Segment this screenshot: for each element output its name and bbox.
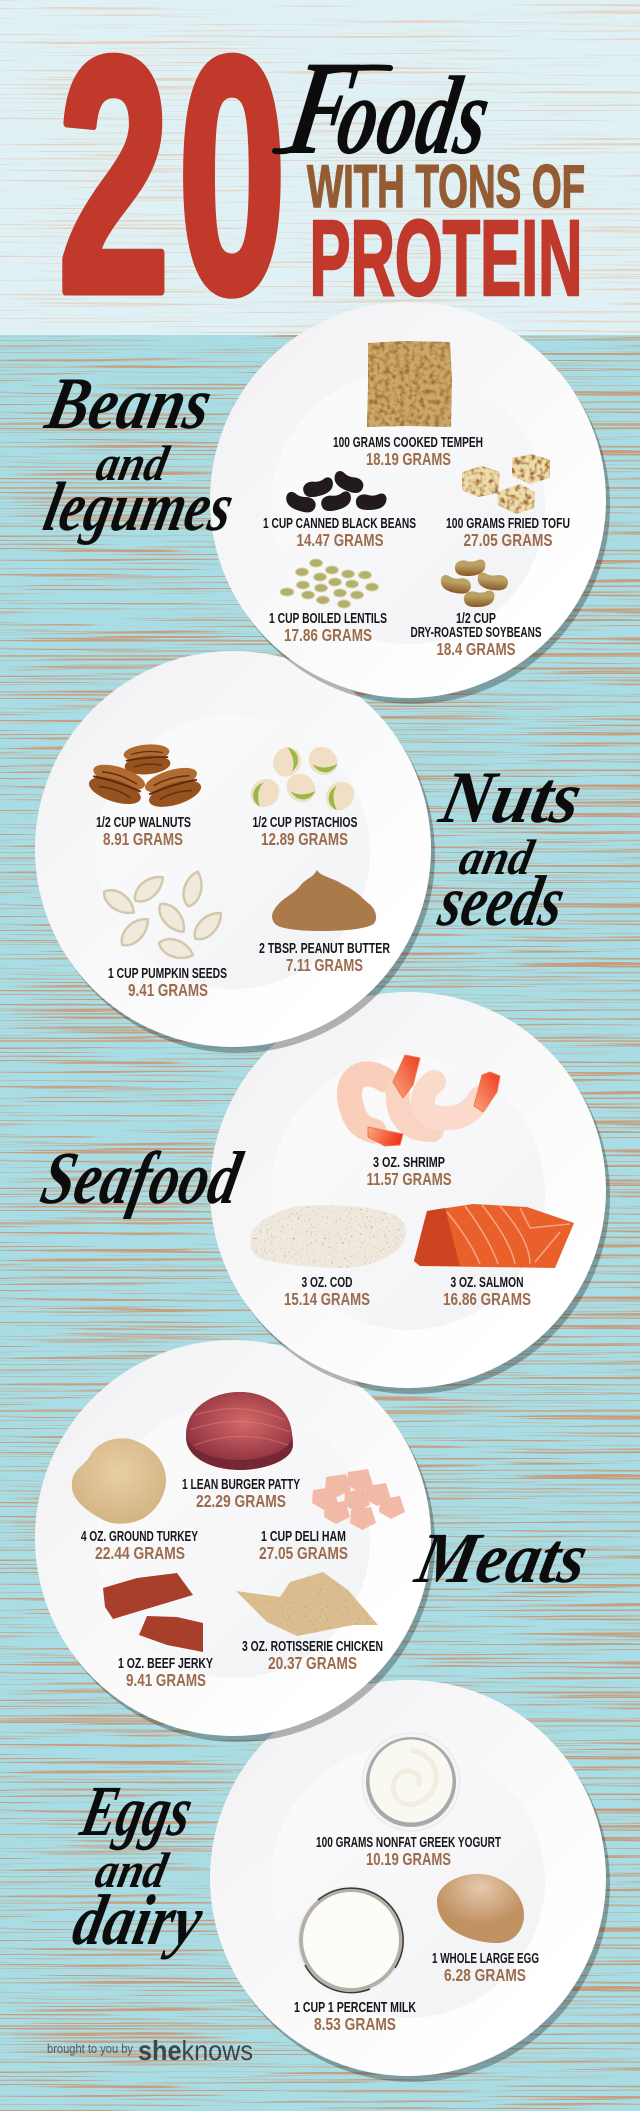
label: milk: 8.53 GRAMS bbox=[314, 2014, 396, 2034]
label: soybeans: 18.4 GRAMS bbox=[436, 639, 516, 659]
heading: nuts and seeds: Nuts bbox=[432, 757, 589, 839]
label: lentils bbox=[269, 611, 387, 645]
label: deli ham: 1 CUP DELI HAM bbox=[261, 1529, 346, 1545]
icon: beef jerky bbox=[103, 1573, 203, 1652]
label: tempeh: 18.19 GRAMS bbox=[366, 449, 451, 469]
icon: milk bbox=[297, 1886, 405, 1994]
label: soybeans: 1/2 CUP bbox=[456, 611, 496, 627]
label: egg bbox=[432, 1951, 539, 1985]
label: shrimp: 3 OZ. SHRIMP bbox=[373, 1155, 445, 1171]
label: fried tofu: 100 GRAMS FRIED TOFU bbox=[446, 516, 570, 532]
label: yogurt: 10.19 GRAMS bbox=[366, 1849, 451, 1869]
plate: beans and legumes bbox=[210, 302, 610, 704]
icon: egg bbox=[437, 1874, 524, 1943]
label: pumpkin seeds: 1 CUP PUMPKIN SEEDS bbox=[108, 966, 227, 982]
label: rotisserie chicken bbox=[242, 1639, 383, 1673]
label: lentils: 17.86 GRAMS bbox=[284, 625, 372, 645]
label: ground turkey: 22.44 GRAMS bbox=[95, 1543, 185, 1563]
label: soybeans: DRY-ROASTED SOYBEANS bbox=[410, 625, 542, 641]
title number 20: 0 bbox=[178, 0, 286, 363]
label: tempeh bbox=[333, 435, 483, 469]
heading: seafood: Seafood bbox=[34, 1137, 249, 1220]
heading: beans and legumes: legumes bbox=[38, 469, 240, 546]
heading: meats: Meats bbox=[409, 1518, 595, 1598]
heading: eggs and dairy: and bbox=[91, 1842, 173, 1898]
label: tempeh: 100 GRAMS COOKED TEMPEH bbox=[333, 435, 483, 451]
icon: burger patty bbox=[186, 1392, 293, 1470]
label: shrimp: 11.57 GRAMS bbox=[366, 1169, 452, 1189]
icon: rotisserie chicken bbox=[236, 1572, 378, 1636]
label: deli ham bbox=[259, 1529, 348, 1563]
icon: fried tofu bbox=[462, 454, 550, 514]
plate: eggs and dairy bbox=[210, 1680, 610, 2082]
label: peanut butter: 2 TBSP. PEANUT BUTTER bbox=[259, 941, 390, 957]
label: cod: 3 OZ. COD bbox=[302, 1275, 352, 1291]
label: walnuts bbox=[96, 815, 191, 849]
label: burger patty: 22.29 GRAMS bbox=[196, 1491, 286, 1511]
label: milk bbox=[294, 2000, 416, 2034]
label: rotisserie chicken: 3 OZ. ROTISSERIE CHICKEN bbox=[242, 1639, 383, 1655]
heading: beans and legumes: Beans bbox=[39, 363, 219, 445]
icon: tempeh bbox=[367, 341, 452, 427]
label: shrimp bbox=[366, 1155, 452, 1189]
credit: brought to you by sheknows: sheknows bbox=[138, 2035, 253, 2066]
label: salmon bbox=[443, 1275, 531, 1309]
label: beef jerky: 1 OZ. BEEF JERKY bbox=[118, 1656, 213, 1672]
credit: brought to you by sheknows: brought to you by bbox=[47, 2042, 134, 2056]
heading: eggs and dairy bbox=[67, 1771, 210, 1960]
label: ground turkey: 4 OZ. GROUND TURKEY bbox=[81, 1529, 198, 1545]
plate: nuts and seeds bbox=[35, 651, 435, 1053]
label: pistachios bbox=[252, 815, 358, 849]
label: lentils: 1 CUP BOILED LENTILS bbox=[269, 611, 387, 627]
label: black beans: 1 CUP CANNED BLACK BEANS bbox=[263, 516, 416, 532]
heading: nuts and seeds bbox=[432, 757, 589, 941]
label: pumpkin seeds: 9.41 GRAMS bbox=[128, 980, 208, 1000]
label: salmon: 3 OZ. SALMON bbox=[450, 1275, 524, 1291]
heading: beans and legumes bbox=[38, 363, 240, 546]
icon: deli ham bbox=[312, 1469, 405, 1530]
label: black beans: 14.47 GRAMS bbox=[296, 530, 384, 550]
heading: eggs and dairy: Eggs bbox=[74, 1771, 200, 1851]
label: egg: 6.28 GRAMS bbox=[444, 1965, 526, 1985]
heading: eggs and dairy: dairy bbox=[67, 1880, 210, 1960]
label: pistachios: 12.89 GRAMS bbox=[261, 829, 348, 849]
label: ground turkey bbox=[81, 1529, 198, 1563]
icon: cod bbox=[250, 1205, 406, 1268]
icon: lentils bbox=[280, 559, 378, 608]
label: cod: 15.14 GRAMS bbox=[284, 1289, 370, 1309]
icon: shrimp bbox=[349, 1055, 500, 1146]
icon: soybeans bbox=[439, 559, 509, 607]
label: cod bbox=[284, 1275, 370, 1309]
label: egg: 1 WHOLE LARGE EGG bbox=[432, 1951, 539, 1967]
icon: yogurt bbox=[362, 1733, 460, 1831]
label: soybeans bbox=[410, 611, 542, 659]
icon: peanut butter bbox=[272, 870, 376, 931]
label: fried tofu: 27.05 GRAMS bbox=[464, 530, 552, 550]
label: peanut butter: 7.11 GRAMS bbox=[286, 955, 363, 975]
header wood background bbox=[0, 0, 640, 335]
label: black beans bbox=[263, 516, 416, 550]
heading: nuts and seeds: and bbox=[455, 829, 539, 885]
label: yogurt bbox=[316, 1835, 501, 1869]
label: deli ham: 27.05 GRAMS bbox=[259, 1543, 348, 1563]
plate: meats bbox=[35, 1340, 435, 1742]
label: milk: 1 CUP 1 PERCENT MILK bbox=[294, 2000, 416, 2016]
heading: beans and legumes: and bbox=[92, 435, 174, 491]
icon: black beans bbox=[284, 470, 387, 515]
label: pistachios: 1/2 CUP PISTACHIOS bbox=[252, 815, 358, 831]
heading: nuts and seeds: seeds bbox=[432, 861, 572, 941]
icon: pumpkin seeds bbox=[100, 869, 227, 963]
credit: brought to you by sheknows bbox=[47, 2035, 253, 2066]
icon: ground turkey bbox=[72, 1438, 166, 1524]
label: rotisserie chicken: 20.37 GRAMS bbox=[268, 1653, 357, 1673]
label: peanut butter bbox=[259, 941, 390, 975]
label: walnuts: 1/2 CUP WALNUTS bbox=[96, 815, 191, 831]
icon: walnuts bbox=[86, 743, 204, 812]
icon: salmon bbox=[414, 1204, 574, 1268]
label: salmon: 16.86 GRAMS bbox=[443, 1289, 531, 1309]
label: yogurt: 100 GRAMS NONFAT GREEK YOGURT bbox=[316, 1835, 501, 1851]
label: beef jerky bbox=[118, 1656, 213, 1690]
label: pumpkin seeds bbox=[108, 966, 227, 1000]
label: burger patty: 1 LEAN BURGER PATTY bbox=[182, 1477, 300, 1493]
plate: seafood bbox=[210, 992, 610, 1394]
label: burger patty bbox=[182, 1477, 300, 1511]
label: beef jerky: 9.41 GRAMS bbox=[126, 1670, 206, 1690]
title word Foods: Foods bbox=[277, 34, 503, 183]
title number 20 bbox=[58, 0, 286, 363]
label: walnuts: 8.91 GRAMS bbox=[103, 829, 183, 849]
title bbox=[58, 0, 585, 363]
label: fried tofu bbox=[446, 516, 570, 550]
icon: pistachios bbox=[245, 741, 360, 816]
